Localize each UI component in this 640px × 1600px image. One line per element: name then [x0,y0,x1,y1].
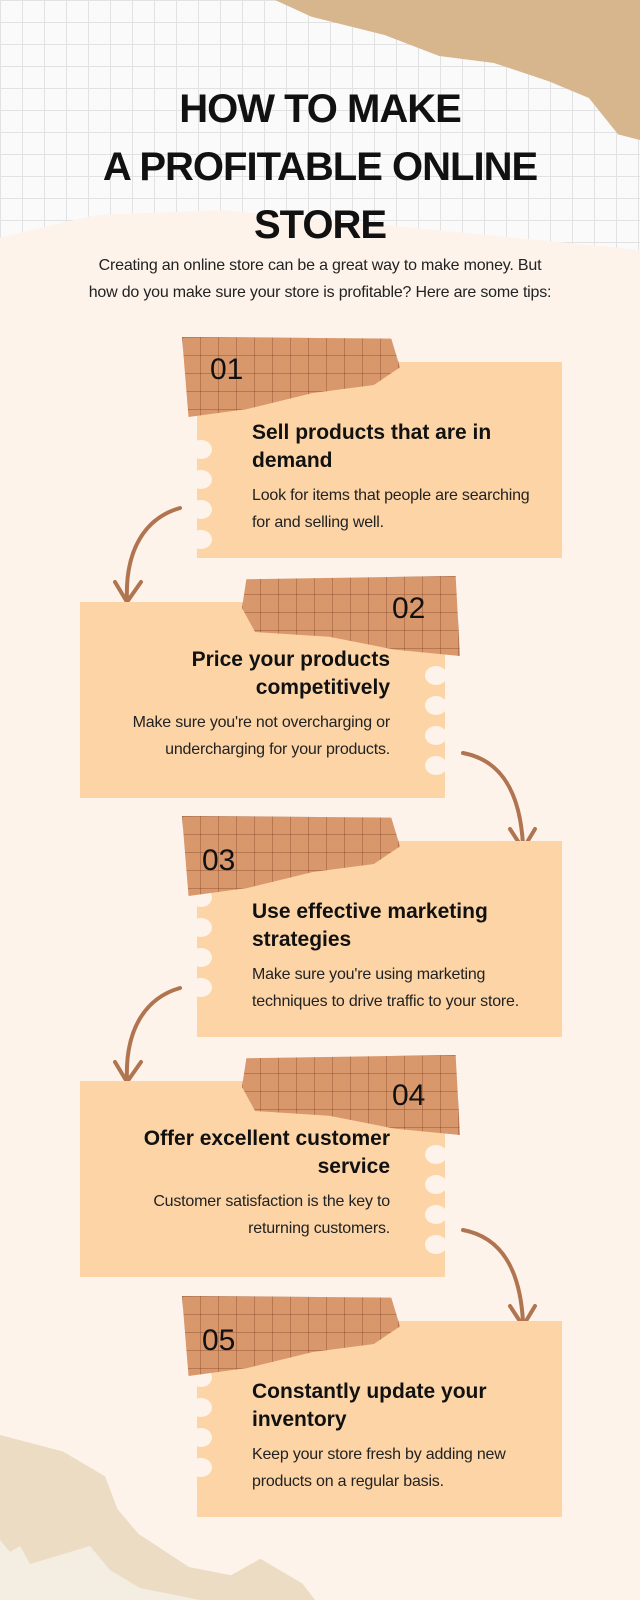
step 5: Constantly update your inventory [252,1380,487,1431]
step 4 [80,1055,460,1277]
title: HOW TO MAKE [179,87,461,131]
step 2: Make sure you're not overcharging or [133,714,390,731]
step 5: 05 [202,1324,235,1357]
step 3: Make sure you're using marketing [252,966,485,983]
arrow 4 [461,1228,538,1321]
step 5 [182,1296,562,1517]
intro text [89,257,551,301]
arrow 3 [112,986,182,1081]
step 4: 04 [392,1079,425,1112]
step 4: Offer excellent customer service [144,1127,390,1178]
step 2 [80,576,460,798]
step 3: Use effective marketing strategies [252,900,488,951]
step 1: Sell products that are in demand [252,421,491,472]
step 3: 03 [202,844,235,877]
intro text: Creating an online store can be a great way to make money. But [99,257,541,274]
step 1: for and selling well. [252,514,384,531]
step 5: products on a regular basis. [252,1473,444,1490]
step 4: returning customers. [248,1220,390,1237]
decoration: newspaper scrap [0,1540,200,1600]
step 3: techniques to drive traffic to your store. [252,993,519,1010]
step 2: undercharging for your products. [165,741,390,758]
step 4: Customer satisfaction is the key to [153,1193,390,1210]
title: STORE [254,203,386,247]
title: A PROFITABLE ONLINE [103,145,537,189]
step 1: 01 [210,353,243,386]
arrow 2 [461,751,538,841]
arrow 1 [112,506,182,602]
background: grid paper header [0,0,640,250]
title [103,87,537,247]
step 3 [182,816,562,1037]
step 1: Look for items that people are searching [252,487,530,504]
decoration: torn paper bottom left [0,1435,315,1600]
step 2: 02 [392,592,425,625]
step 2: Price your products competitively [192,648,390,699]
intro text: how do you make sure your store is profitable? Here are some tips: [89,284,551,301]
step 1 [182,337,562,558]
decoration: torn brown paper top right [275,0,640,140]
step 5: Keep your store fresh by adding new [252,1446,506,1463]
